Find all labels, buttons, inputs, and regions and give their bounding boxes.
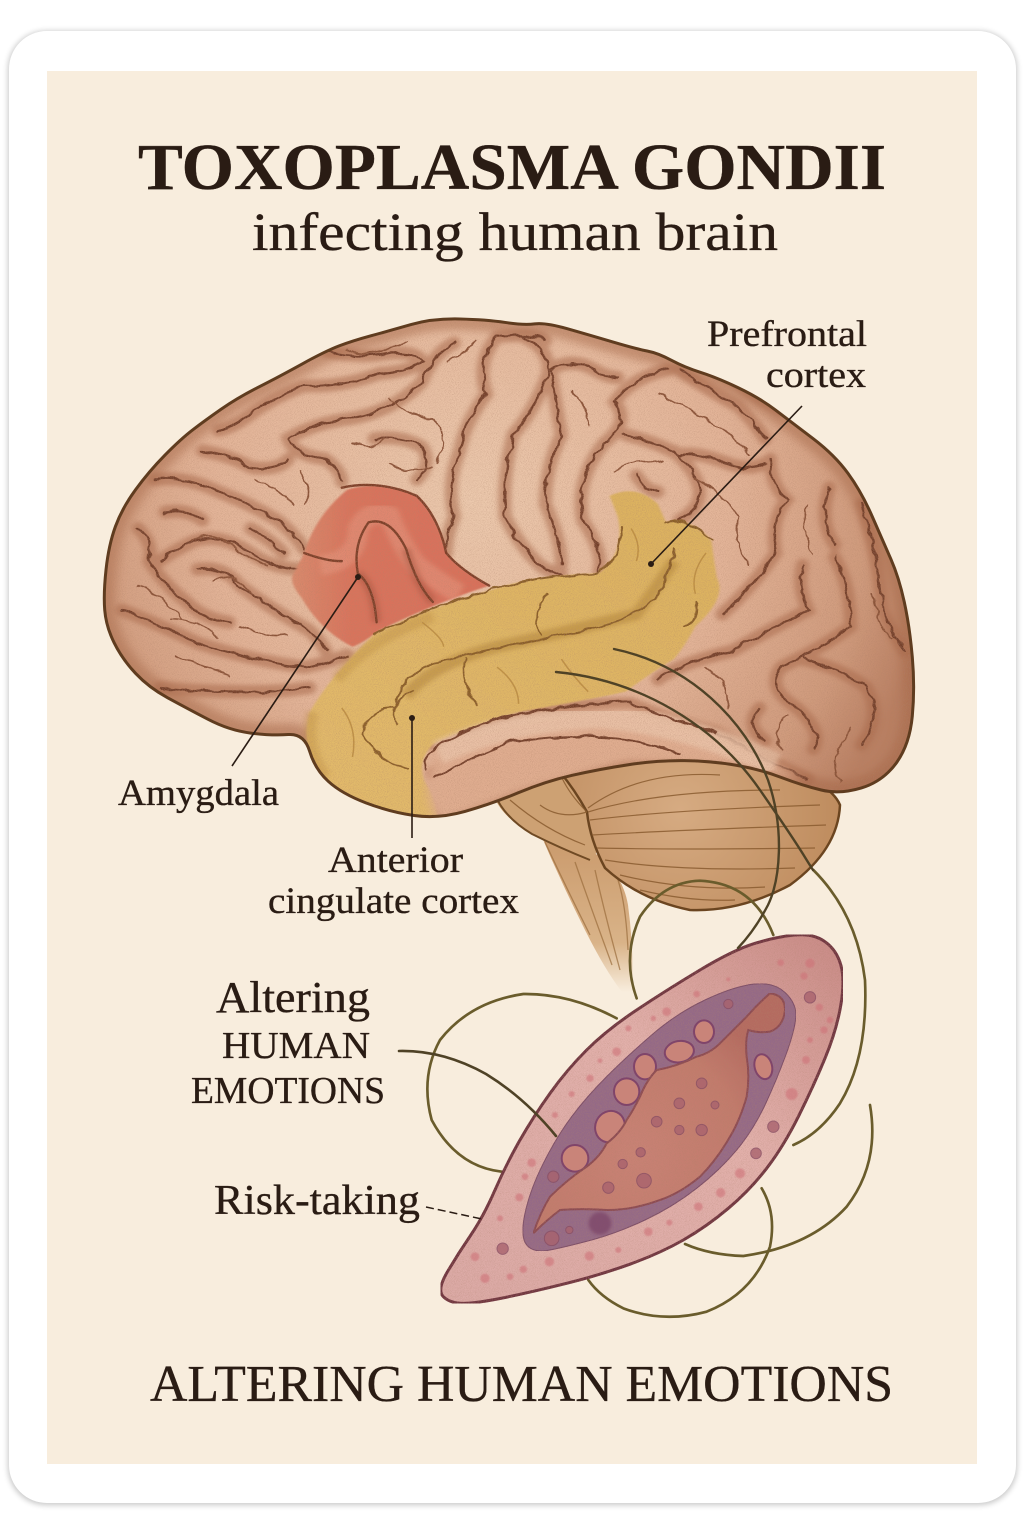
label: altering human emotions: Altering (216, 973, 370, 1022)
highlighted region: yellow cingulate (307, 491, 719, 826)
label: risk-taking: Risk-taking (214, 1178, 420, 1224)
illustration: brain (90, 300, 930, 992)
label: altering human emotions (191, 973, 385, 1112)
leader dots (355, 561, 654, 721)
flagella filaments (427, 870, 872, 1317)
cerebellum (510, 755, 840, 910)
fine sulci branches (138, 341, 894, 781)
lower temporal fold (425, 702, 802, 822)
leader: prefrontal cortex (651, 406, 802, 564)
illustration: parasite (427, 870, 872, 1317)
leader: amygdala (232, 577, 358, 766)
leader lines (232, 406, 802, 1219)
organelles around nucleus (562, 1020, 775, 1172)
cerebrum (90, 300, 930, 830)
sharp sulci lines (122, 335, 904, 779)
soft sulci shading (122, 335, 904, 779)
label: altering human emotions: HUMAN (222, 1025, 370, 1067)
label: anterior cingulate cortex: cingulate cortex (268, 881, 520, 922)
cytoplasm speckles (471, 959, 833, 1283)
label: altering human emotions: EMOTIONS (191, 1070, 385, 1112)
pons (492, 770, 620, 862)
leader: anterior cingulate cortex (411, 718, 413, 838)
highlighted region: red amygdala (292, 485, 489, 647)
footer heading: ALTERING HUMAN EMOTIONS (150, 1356, 893, 1413)
purple inner layer (523, 984, 796, 1251)
subtitle: infecting human brain (252, 202, 778, 262)
label connector: altering human emotions (399, 1051, 556, 1136)
brainstem (538, 828, 632, 992)
nucleus (533, 993, 785, 1233)
label: prefrontal cortex: Prefrontal (707, 314, 867, 355)
label: amygdala: Amygdala (118, 773, 279, 814)
inner edge shading (104, 319, 914, 817)
label: anterior cingulate cortex: Anterior (328, 840, 463, 881)
leader: risk-taking (426, 1207, 482, 1219)
label: prefrontal cortex: cortex (766, 355, 867, 396)
nucleus and cytoplasm spots (497, 992, 816, 1254)
parasite body (441, 935, 843, 1303)
label: prefrontal cortex (707, 314, 867, 396)
label: anterior cingulate cortex (268, 840, 520, 922)
filaments from brain to parasite (556, 649, 813, 948)
title: TOXOPLASMA GONDII (138, 131, 886, 204)
